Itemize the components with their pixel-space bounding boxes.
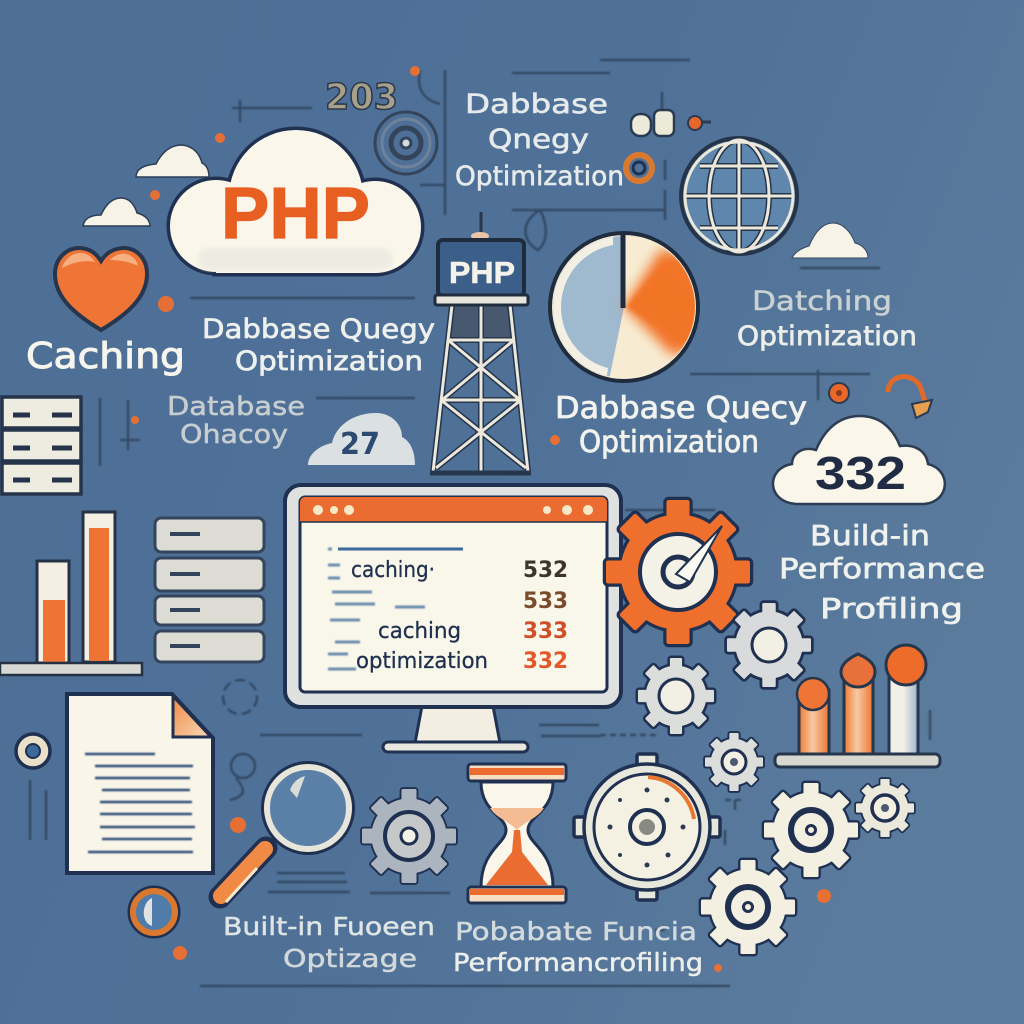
text: Database query optimization center — [555, 391, 807, 460]
icon: big orange gear — [606, 500, 750, 644]
icon: small cloud top — [136, 145, 209, 177]
text: monitor values: 533 — [523, 589, 568, 614]
text: Database query optimization left — [202, 314, 435, 377]
text: Datching optimization right: Datching — [752, 286, 892, 317]
icon: small orange-ring coin — [129, 887, 179, 937]
heading: year number: 203 — [325, 77, 398, 118]
icon: orange node — [688, 116, 711, 130]
icon: gear bottom right large — [701, 860, 795, 954]
chart: pie — [550, 232, 715, 385]
text: Caching: Caching — [26, 336, 185, 377]
text: monitor rows: optimization — [356, 649, 488, 674]
icon: target — [375, 112, 437, 174]
text: Database query optimization left: Dabbase Quegy — [202, 314, 435, 345]
chart: flame bars right — [775, 645, 940, 767]
text: Database query optimization top: Dabbase — [465, 89, 608, 120]
icon: orange node on line — [829, 383, 849, 403]
text: monitor values: 532 — [523, 558, 568, 583]
text: Build-in Performance Profiling: Performance — [779, 552, 985, 585]
text: Build-in Performance Profiling: Profiling — [820, 592, 963, 625]
text: Built-in function optimization: Optizage — [283, 944, 417, 973]
icon: gear right — [727, 603, 811, 687]
text: Built-in function optimization: Built-in Fuoeen — [223, 912, 435, 941]
text: monitor values — [523, 558, 568, 674]
icon: server rack left — [2, 397, 81, 494]
text: Built-in function optimization — [223, 912, 435, 973]
icon: gear far right — [856, 779, 914, 837]
icon: small cloud right — [792, 223, 868, 258]
text: monitor values: 333 — [523, 619, 568, 644]
icon: large PHP cloud — [170, 130, 421, 273]
icon: heart — [55, 248, 147, 330]
icon: gear bottom right top — [764, 783, 858, 877]
text: Database query optimization center: Dabbase Quecy — [555, 391, 807, 426]
text: Database function performance profiling: Pobabate Funcia — [455, 917, 697, 946]
icon: server stack center-left — [155, 518, 264, 662]
text: Database function performance profiling: Performancrofiling — [453, 948, 703, 977]
text: monitor rows — [351, 558, 488, 674]
icon: monitor with list — [285, 485, 621, 752]
chart: bars left — [0, 512, 142, 675]
icon: small cloud with 27 — [308, 413, 415, 465]
text: monitor values: 332 — [523, 649, 568, 674]
icon: orange ring — [626, 155, 652, 181]
icon: pair of nodes — [631, 110, 674, 136]
icon: small target left — [16, 734, 50, 768]
icon: gear bottom center — [362, 789, 456, 883]
text: tower PHP: PHP — [449, 255, 515, 290]
text: Database query optimization top — [455, 89, 624, 192]
text: Datching optimization right — [737, 286, 917, 352]
text: Database query optimization left: Optimization — [235, 346, 423, 377]
text: Database function performance profiling — [453, 917, 703, 977]
text: Database query optimization center: Optimization — [579, 425, 759, 460]
text: Build-in Performance Profiling: Build-in — [810, 519, 930, 552]
text: monitor rows: caching — [378, 619, 461, 644]
icon: document — [67, 694, 213, 873]
text: PHP cloud label: PHP — [221, 174, 370, 254]
icon: hourglass — [468, 764, 566, 903]
text: Database query optimization top: Optimization — [455, 161, 624, 192]
text: faded database query: Database — [167, 392, 305, 422]
decorative small orange dots — [131, 66, 831, 972]
icon: gear small — [705, 733, 763, 791]
icon: magnifier — [220, 764, 352, 902]
icon: oil tower with PHP sign — [430, 212, 531, 473]
icon: large disc gear — [574, 754, 720, 900]
text: Datching optimization right: Optimization — [737, 321, 917, 352]
icon: gear center — [638, 658, 714, 734]
text: Database query optimization top: Qnegy — [488, 124, 589, 155]
icon: cloud with 332: 332 — [815, 447, 906, 499]
text: faded database query: Ohacoy — [180, 420, 288, 450]
icon: cloud with 332 — [773, 416, 945, 504]
decorative ink marks ring — [30, 60, 930, 986]
text: Build-in Performance Profiling — [779, 519, 985, 625]
icon: small orange hook — [888, 377, 932, 418]
icon: small cloud left — [83, 198, 150, 226]
text: faded database query — [167, 392, 305, 450]
icon: small cloud with 27: 27 — [340, 427, 380, 462]
text: monitor rows: caching· — [351, 558, 435, 583]
icon: globe — [681, 138, 797, 254]
